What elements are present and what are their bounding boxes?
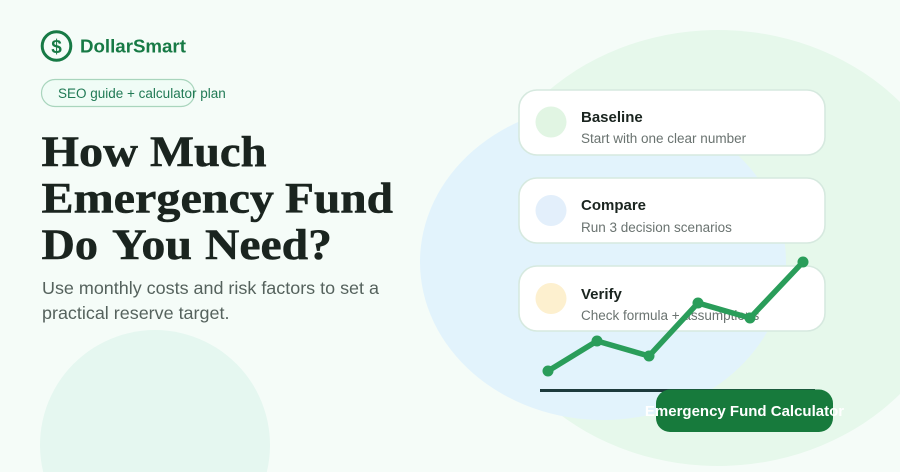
background blob: green: [473, 30, 900, 466]
chart axis: [540, 389, 815, 392]
background blob: blue: [420, 104, 786, 420]
title: [42, 129, 393, 269]
title: How: [42, 129, 138, 176]
icon: dollar coin: [42, 32, 71, 60]
card: verify: Check formula + assumptions: [581, 308, 759, 323]
card: verify: Verify: [581, 286, 623, 303]
card: compare: [519, 178, 825, 243]
calculator button: [645, 390, 844, 432]
background blob: mint circle: [40, 330, 270, 472]
badge pill: SEO guide + calculator plan: [58, 86, 226, 101]
card: baseline: [519, 90, 825, 155]
title: Do: [42, 222, 98, 269]
icon: dollar coin: $: [51, 37, 62, 58]
card: compare: Run 3 decision scenarios: [581, 220, 732, 235]
card: baseline: Start with one clear number: [581, 131, 747, 146]
title: Need?: [205, 222, 332, 269]
title: Emergency: [42, 176, 275, 222]
icon: blue dot: [536, 195, 566, 226]
subtitle: Use monthly costs and risk factors to set a: [42, 278, 379, 298]
card: compare: Compare: [581, 197, 646, 214]
icon: green dot: [536, 106, 566, 138]
line chart: [542, 256, 808, 376]
icon: yellow dot: [536, 283, 566, 314]
logo: [42, 32, 186, 60]
card: baseline: Baseline: [581, 109, 643, 126]
badge pill: [42, 80, 226, 106]
brand name: DollarSmart: [80, 36, 186, 56]
calculator button: Emergency Fund Calculator: [645, 403, 844, 420]
subtitle: practical reserve target.: [42, 303, 229, 323]
subtitle: [42, 278, 379, 323]
title: Much: [150, 129, 267, 176]
title: Fund: [285, 176, 393, 222]
card: verify: [519, 266, 825, 331]
title: You: [112, 222, 192, 269]
